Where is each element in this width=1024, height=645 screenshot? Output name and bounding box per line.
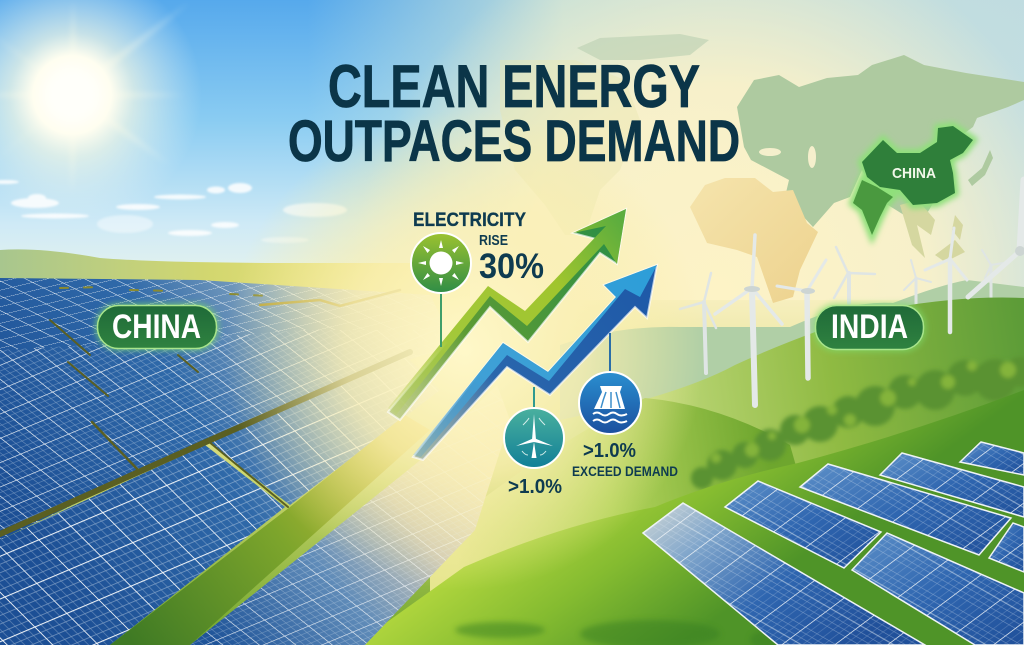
icon: hydro dam (579, 372, 641, 434)
turbine (777, 260, 826, 378)
map: Black Sea (759, 148, 781, 156)
icon: wind turbine (504, 408, 564, 468)
label: China on map: CHINA (892, 165, 936, 182)
green growth arrow (388, 209, 626, 420)
valley slope (430, 398, 800, 600)
sun (0, 0, 202, 225)
tree line (691, 357, 1024, 489)
turbine: large right (968, 180, 1024, 297)
horizon fields (0, 249, 470, 320)
connector line (440, 293, 442, 347)
panel row D (880, 453, 1024, 517)
label pill: China: CHINA (112, 308, 201, 346)
world map (500, 34, 1024, 303)
map: Southeast Asia (900, 200, 965, 262)
solar panels middle (0, 330, 440, 533)
value: 30%: 30% (479, 247, 544, 286)
foreground green hill (355, 390, 1024, 645)
wind turbines small (680, 247, 1003, 373)
label: rise: RISE (479, 232, 508, 249)
panel row B (725, 481, 881, 568)
solar field: left (0, 278, 510, 645)
label: electricity: ELECTRICITY (413, 209, 526, 231)
value: wind: >1.0% (508, 476, 562, 498)
map: Africa (690, 178, 818, 303)
connector line (609, 333, 611, 373)
panel row G (989, 523, 1024, 572)
turbine (680, 273, 716, 373)
turbine (925, 228, 967, 332)
panel row A (643, 503, 925, 645)
callout: hydro (572, 333, 678, 479)
clouds (0, 180, 347, 243)
value: hydro: >1.0% (583, 440, 636, 462)
turbine (904, 260, 931, 310)
solar panels second row (208, 355, 440, 505)
map: Greenland (577, 34, 709, 60)
distant hills (560, 280, 1024, 420)
turbine (982, 250, 1003, 313)
title line 2: OUTPACES DEMAND (288, 109, 740, 174)
map: Caspian Sea (808, 146, 816, 168)
panel row C (800, 464, 1011, 555)
label pill: India (813, 303, 926, 352)
title line 1: CLEAN ENERGY (328, 53, 700, 120)
blue growth arrow (413, 265, 657, 460)
grass strip (110, 415, 430, 645)
panel row E (960, 442, 1024, 475)
sunlight glow over centre (225, 110, 705, 590)
connector line (533, 387, 535, 407)
label pill: China (95, 303, 219, 351)
callout: wind (504, 387, 564, 498)
turbine (834, 247, 875, 303)
label: exceed demand: EXCEED DEMAND (572, 463, 678, 479)
mid green hill (560, 298, 1024, 645)
title (288, 53, 740, 174)
map: Eurasia (737, 55, 1024, 227)
solar panels: right foreground (643, 442, 1024, 645)
China and India map highlight (853, 126, 973, 235)
turbine (715, 235, 782, 405)
panel row F (852, 533, 1024, 645)
icon: sun (411, 233, 471, 293)
label pill: India: INDIA (831, 308, 908, 346)
solar panels far (0, 278, 455, 540)
map: Americas (500, 60, 640, 235)
callout: electricity (411, 209, 544, 347)
solar panels near (0, 445, 285, 645)
wind turbines large (715, 180, 1024, 405)
solar panels bottom (190, 385, 510, 645)
gap strips (0, 287, 410, 534)
map: Japan (968, 150, 993, 186)
